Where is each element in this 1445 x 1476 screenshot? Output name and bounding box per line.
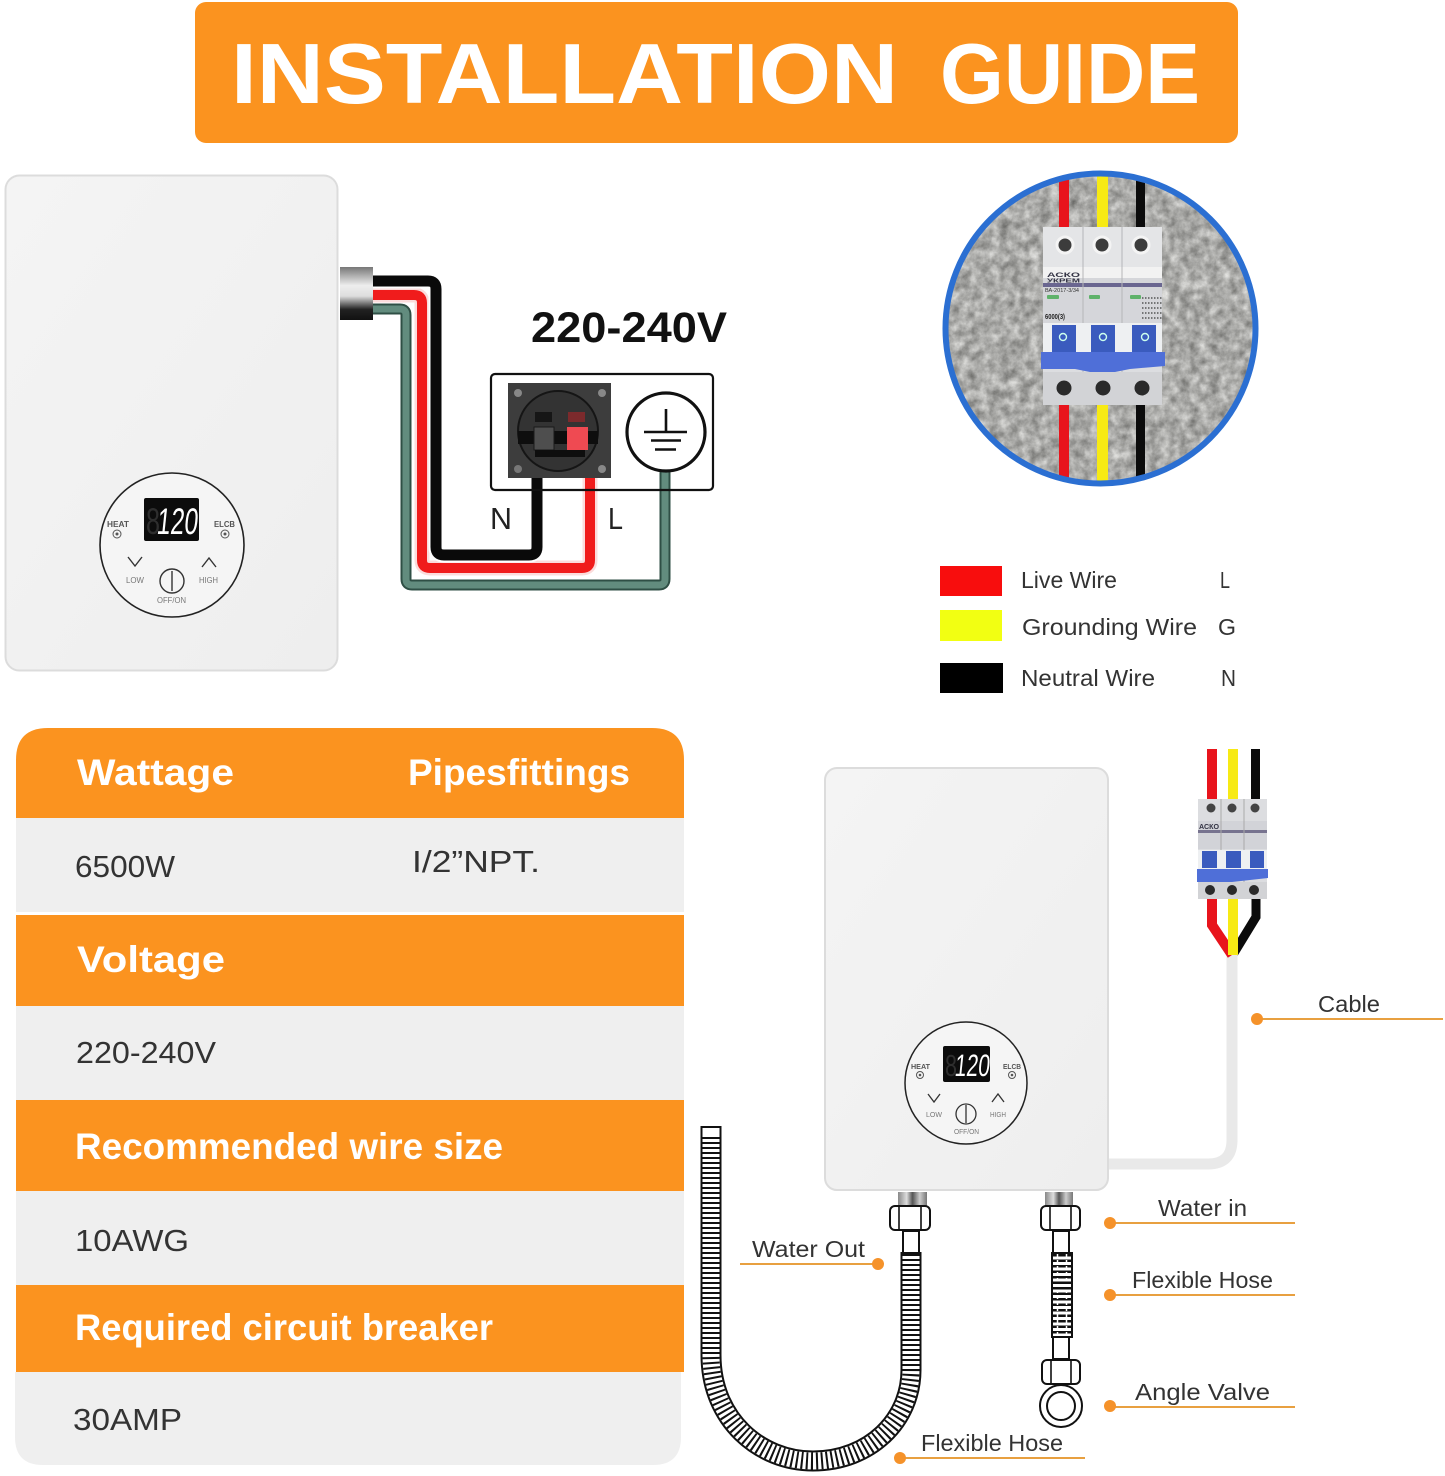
row: wire size value: 10AWG <box>75 1223 189 1258</box>
digital display: 8 <box>945 1048 957 1083</box>
callout: cable: Cable <box>1318 991 1380 1017</box>
callout: cable <box>1251 991 1443 1025</box>
control panel: ELCB <box>1003 1062 1022 1071</box>
header: voltage: Voltage <box>77 939 225 980</box>
callout: water in: Water in <box>1158 1195 1247 1221</box>
water in hose assembly <box>1040 1192 1082 1427</box>
row: circuit breaker value <box>15 1372 681 1465</box>
title: INSTALLATION <box>231 27 898 122</box>
row: circuit breaker value: 30AMP <box>73 1402 182 1437</box>
title: GUIDE <box>940 27 1200 122</box>
callout: flexible hose right: Flexible Hose <box>1132 1267 1273 1293</box>
wire colour legend: Grounding Wire <box>1022 614 1197 640</box>
control panel: HEAT <box>107 519 130 529</box>
callout: angle valve <box>1104 1379 1295 1412</box>
control panel: LOW <box>126 576 144 585</box>
wire colour legend: Neutral Wire <box>1021 665 1155 691</box>
angle valve ring <box>1040 1385 1082 1427</box>
wiring diagram <box>340 267 727 585</box>
earth wire <box>373 309 665 585</box>
digital display: 8 <box>146 501 160 542</box>
wire colour legend: G <box>1218 614 1236 640</box>
wire colour legend <box>940 566 1236 693</box>
water heater unit, small <box>825 768 1108 1190</box>
wire colour legend: N <box>1221 665 1236 691</box>
row: wire size value <box>16 1191 684 1285</box>
earth symbol <box>627 393 705 471</box>
callout: water out <box>740 1236 884 1270</box>
outlet box <box>491 374 713 490</box>
header: recommended wire size: Recommended wire size <box>75 1126 503 1167</box>
water out fitting <box>890 1192 930 1253</box>
control panel: OFF/ON <box>157 596 186 605</box>
row: wattage values: I/2”NPT. <box>412 844 540 879</box>
digital display: 120 <box>155 500 201 542</box>
breaker: ВА-2017-3/34 <box>1045 288 1079 294</box>
speaker-style terminal socket <box>508 383 611 478</box>
header: required circuit breaker: Required circuit breaker <box>75 1307 493 1348</box>
header: wattage and pipe fittings: Pipesfittings <box>408 752 630 793</box>
callout: water out: Water Out <box>752 1236 866 1262</box>
control panel: LOW <box>926 1112 942 1119</box>
digital display <box>144 498 201 542</box>
header: voltage <box>16 915 684 1006</box>
braided section <box>1052 1253 1072 1337</box>
flexible outlet hose <box>700 1127 922 1461</box>
neutral wire <box>373 281 537 555</box>
callout: angle valve: Angle Valve <box>1135 1379 1270 1405</box>
control panel: HIGH <box>199 576 218 585</box>
control panel <box>905 1022 1027 1144</box>
wire colour legend: L <box>1220 567 1230 593</box>
callout: flexible hose bottom <box>894 1430 1085 1464</box>
L label: L <box>608 501 623 536</box>
wire colour legend: Live Wire <box>1021 567 1117 593</box>
header: wattage and pipe fittings <box>16 728 684 818</box>
callout: water in <box>1104 1195 1295 1229</box>
control panel: ELCB <box>214 519 235 529</box>
breaker <box>1041 227 1165 405</box>
small breaker with wires: АСКО <box>1199 824 1220 831</box>
row: voltage value <box>16 1006 684 1100</box>
specification table <box>15 728 684 1465</box>
live wire <box>373 295 590 568</box>
circuit breaker photo in blue circle <box>945 172 1257 485</box>
control panel <box>100 473 244 617</box>
digital display <box>943 1046 992 1083</box>
wires <box>1059 172 1145 484</box>
row: voltage value: 220-240V <box>76 1035 216 1070</box>
control panel: HEAT <box>911 1062 930 1071</box>
breaker: УКРЕМ <box>1047 278 1081 284</box>
breaker: 6000(3) <box>1045 314 1065 321</box>
header: recommended wire size <box>16 1100 684 1191</box>
callout: flexible hose bottom: Flexible Hose <box>921 1430 1063 1456</box>
control panel: OFF/ON <box>954 1129 979 1136</box>
concrete texture <box>945 173 1257 485</box>
N label: N <box>490 501 512 536</box>
header: required circuit breaker <box>16 1285 684 1372</box>
small breaker with wires <box>1197 749 1268 955</box>
digital display: 120 <box>953 1048 992 1083</box>
callout: flexible hose right <box>1104 1267 1295 1301</box>
row: wattage values: 6500W <box>75 849 176 884</box>
voltage label: 220-240V <box>531 304 727 352</box>
row: wattage values <box>16 818 684 912</box>
title banner <box>195 2 1238 143</box>
breaker: АСКО <box>1047 273 1081 279</box>
water heater unit, large <box>6 176 338 670</box>
control panel: HIGH <box>990 1112 1006 1119</box>
header: wattage and pipe fittings: Wattage <box>77 752 234 793</box>
cable gland <box>340 267 373 320</box>
power cable, lower diagram <box>1108 950 1232 1164</box>
